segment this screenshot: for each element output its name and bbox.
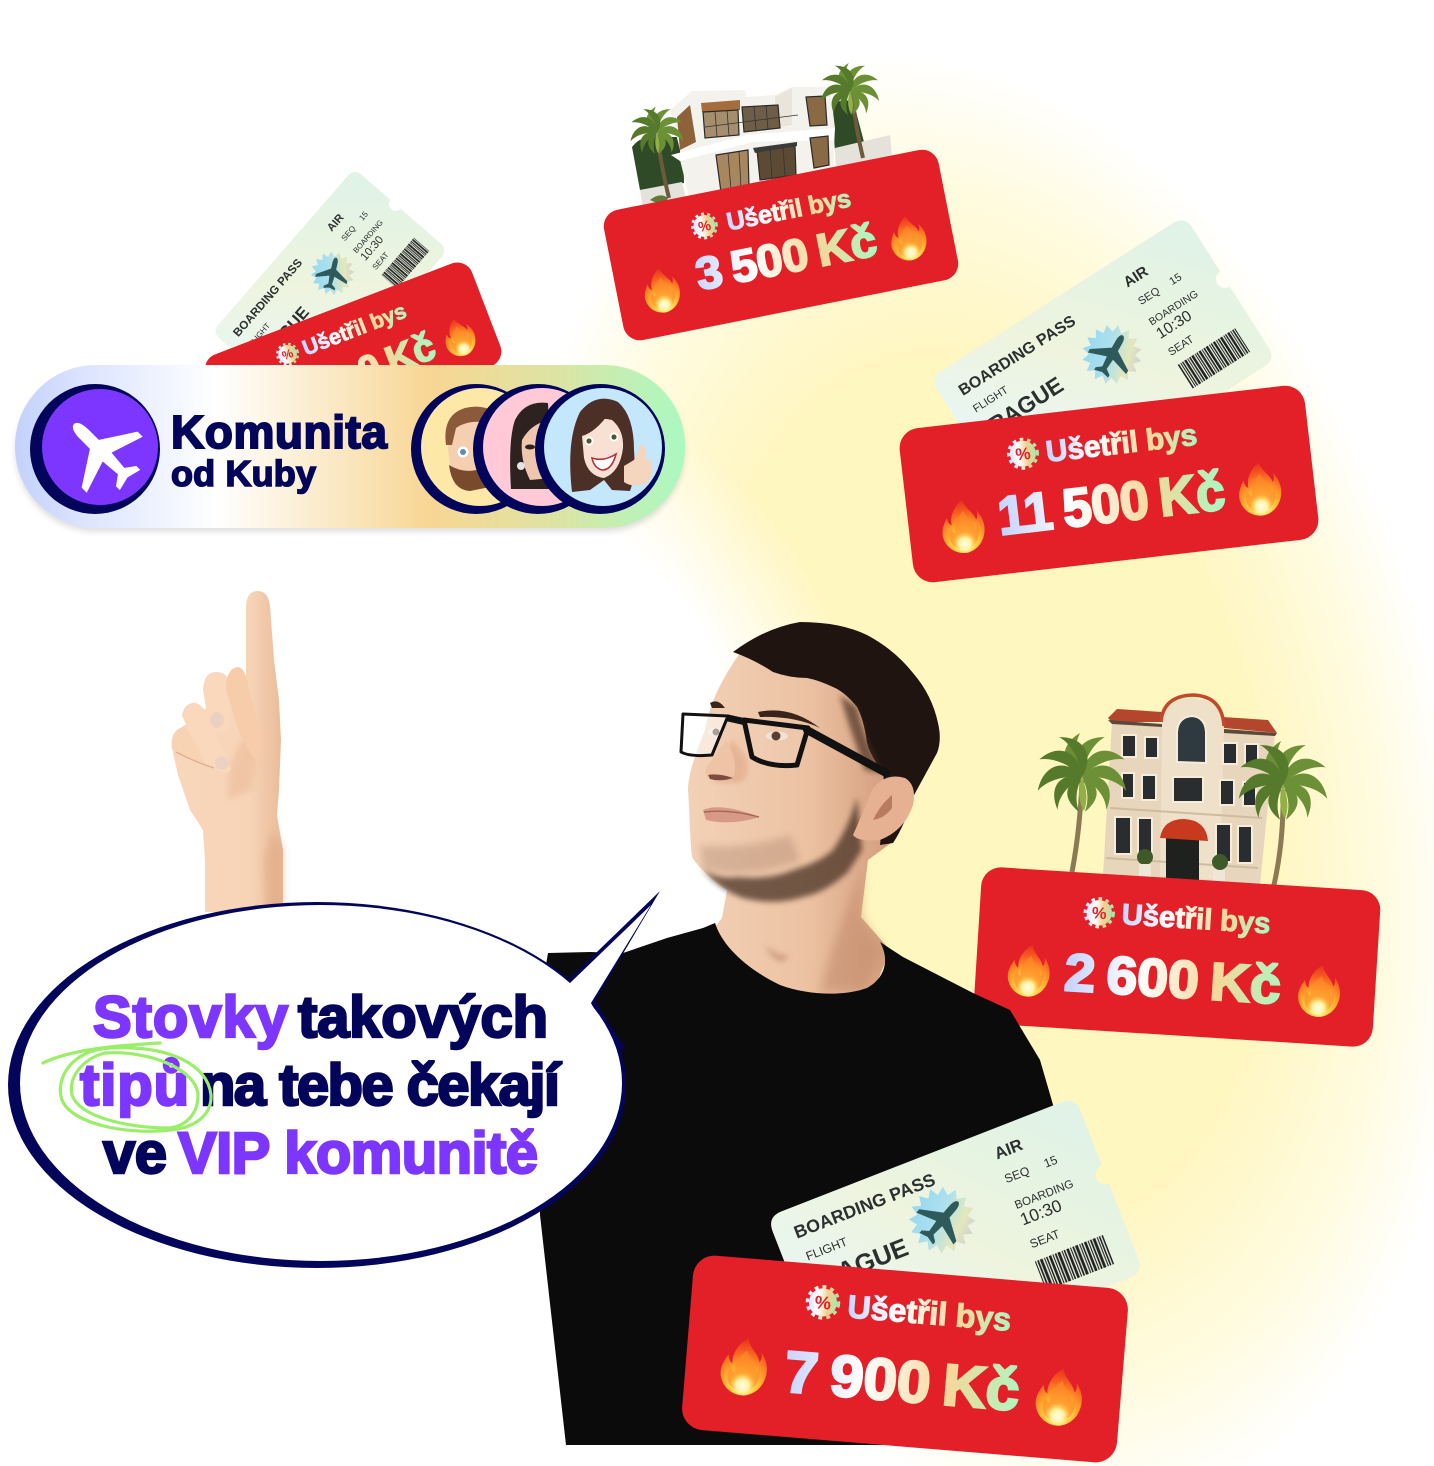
bubble text: Stovky (93, 985, 288, 1050)
bubble text: ve (103, 1121, 167, 1186)
palm trees (657, 135, 669, 198)
curled fingers (172, 667, 262, 773)
savings card: 2 600 Kč (973, 866, 1381, 1048)
palm trees (1072, 780, 1082, 872)
savings card: 2 600 Kč: Ušetřil bys (1121, 898, 1271, 940)
hair (733, 622, 940, 845)
savings card: 7 900 Kč: 7 900 Kč (782, 1339, 1022, 1423)
eyes (766, 732, 788, 740)
hedges and garden wall (632, 137, 684, 190)
boarding pass: bottom (767, 1097, 1144, 1393)
savings card: 7 900 Kč (680, 1254, 1130, 1464)
savings card: 11 500 Kč: 11 500 Kč (995, 461, 1228, 547)
badge: % (1091, 903, 1107, 923)
boarding pass: bottom: BOARDING PASS (791, 1169, 938, 1242)
boarding pass: right: AIR (1120, 263, 1152, 291)
bubble text: takových (298, 985, 548, 1050)
savings card: 3 500 Kč: 3 500 Kč (691, 215, 881, 300)
boarding pass: top left: AIR (325, 212, 346, 234)
badge (690, 212, 719, 240)
house body (670, 87, 835, 205)
bubble text: na tebe čekají (200, 1053, 562, 1118)
boarding pass: bottom: 15 (1042, 1153, 1060, 1171)
speech bubble (8, 891, 660, 1268)
savings card: 3 500 Kč: Ušetřil bys (724, 185, 853, 236)
boarding pass: right (930, 216, 1276, 521)
green scribble around tipů (43, 1043, 211, 1131)
boarding pass: right: BOARDING (1147, 288, 1200, 328)
ear (853, 776, 914, 840)
stubble (703, 797, 862, 902)
boarding pass: bottom: SEAT (1028, 1227, 1062, 1251)
boarding pass: bottom: SEQ (1002, 1164, 1032, 1186)
boarding pass: top left: PRAGUE (252, 303, 313, 370)
badge: % (814, 1291, 832, 1314)
community pill (15, 365, 685, 532)
neck and face (688, 650, 905, 1000)
boarding pass: top left: FLIGHT (247, 321, 272, 349)
boarding pass: top left: SEAT (371, 250, 391, 272)
badge: % (280, 346, 295, 363)
boarding pass: bottom: BOARDING (1013, 1177, 1075, 1212)
boarding pass: right: 10:30 (1153, 307, 1195, 343)
avatar: woman dark hair (473, 384, 603, 514)
boarding pass: bottom: AIR (992, 1135, 1025, 1163)
boarding pass: right: PRAGUE (971, 371, 1068, 446)
brows (758, 710, 820, 728)
pill title: Komunita (171, 406, 387, 458)
boarding pass: bottom: PRAGUE (800, 1234, 912, 1299)
black t-shirt (540, 923, 1060, 1445)
savings card: top left (partly hidden): Ušetřil bys (299, 298, 410, 360)
icon: plane in purple circle (30, 384, 160, 514)
savings card: 11 500 Kč (897, 384, 1321, 584)
hand pointing up (172, 591, 283, 912)
boarding pass: top left: SEQ (340, 224, 357, 243)
man looking up (540, 622, 1060, 1445)
boarding pass: right: FLIGHT (971, 384, 1011, 415)
savings card: 7 900 Kč: Ušetřil bys (846, 1288, 1013, 1338)
boarding pass: top left: BOARDING (351, 218, 385, 255)
glasses (681, 714, 886, 773)
boarding pass: top left: 15 (357, 209, 370, 222)
villa with palms (628, 60, 892, 215)
badge (1084, 898, 1114, 928)
savings card: 11 500 Kč: Ušetřil bys (1044, 419, 1199, 469)
badge: % (697, 218, 713, 236)
nose (712, 740, 748, 783)
boarding pass: top left: 10:30 (359, 234, 386, 263)
badge: % (1014, 444, 1032, 464)
boarding pass: bottom: FLIGHT (804, 1234, 850, 1263)
boarding pass: right: BOARDING PASS (956, 312, 1079, 400)
badge (274, 341, 301, 368)
bubble text: VIP komunitě (178, 1121, 538, 1186)
boarding pass: bottom: 10:30 (1017, 1195, 1064, 1229)
savings card: top left (partly hidden) (200, 258, 506, 463)
savings card: top left (partly hidden): 0 Kč (352, 325, 441, 393)
badge (806, 1286, 840, 1319)
savings card: 3 500 Kč (601, 147, 961, 343)
boarding pass: right: 15 (1167, 271, 1184, 288)
bubble text (80, 985, 562, 1186)
badge (1007, 438, 1039, 470)
boarding pass: top left (212, 168, 448, 413)
boarding pass: right: SEQ (1136, 285, 1163, 308)
bubble text: tipů (80, 1053, 189, 1118)
hotel with palms (1034, 695, 1331, 885)
savings card: 2 600 Kč: 2 600 Kč (1063, 943, 1283, 1016)
pill title: od Kuby (171, 453, 316, 494)
avatar: woman with thumb up (535, 384, 665, 514)
boarding pass: right: SEAT (1166, 333, 1196, 359)
avatar: man (411, 384, 541, 514)
mouth (703, 807, 760, 822)
pill title (171, 406, 387, 494)
boarding pass: top left: BOARDING PASS (231, 256, 305, 339)
